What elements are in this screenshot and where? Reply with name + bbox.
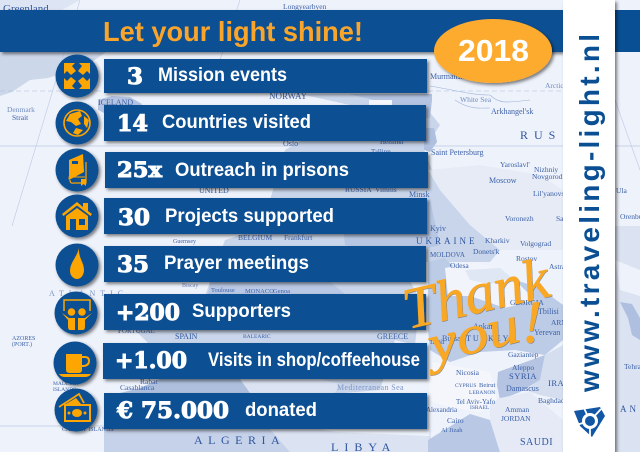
row: donated: donated [245,400,317,421]
row: outreach in prisons: 25x [117,157,163,182]
map place names: ICELAND [98,98,133,107]
map place names: Cairo [447,416,464,425]
map place names: TURKEY [466,334,510,343]
map place names: SYRIA [509,371,537,381]
map place names: Yaroslavl' [500,160,530,169]
row: prayer meetings: 35 [117,252,149,278]
map place names: NORWAY [269,91,308,101]
map place names: IRA [548,378,564,388]
title text: Let your light shine! [103,16,363,47]
map place names: Guernsey [173,239,196,245]
map place names: Genoa [273,288,290,295]
map place names: Astra [549,262,566,271]
map place names: Yerevan [534,328,560,337]
row: donated [104,393,427,429]
map place names: Strait [12,113,29,122]
map place names: Casablanca [120,383,155,392]
map place names: Murmansk [430,72,465,81]
map place names: Volgograd [520,239,551,248]
row: outreach in prisons [105,152,428,188]
thank you lettering: you [416,294,525,376]
map place names: Ula [616,186,628,195]
map place names: Biscay [182,283,198,289]
row: projects supported: 30 [118,205,150,231]
map place names: SPAIN [175,332,198,341]
map place names: White Sea [460,95,492,104]
map place names: BELGIUM [238,233,272,242]
map place names: Helsinki [380,138,404,146]
row: outreach in prisons: Outreach in prisons [175,160,349,181]
map place names: SAUDI [520,437,553,448]
map place names: Amman [505,405,529,414]
website address: www.traveling-light.nl [574,34,605,393]
map place names: Tbilisi [538,307,560,316]
map place names: Damascus [506,384,539,393]
year badge: 2018 [458,33,529,68]
icon: coffee cup [54,342,96,384]
icon: banknotes [54,388,98,432]
map place names: Baghdad [538,396,565,405]
map place names: Longyearbyen [283,2,327,11]
map place names: Ankara [473,322,497,331]
row: mission events [104,59,427,93]
map place names: CANARY ISLANDS [62,427,114,433]
map place names: Arctic [545,81,564,90]
icon: arrows [56,54,98,98]
map place names: Frankfurt [284,233,313,242]
icon: house [56,194,98,238]
map place names: AN [620,404,639,414]
row: prayer meetings: Prayer meetings [164,253,309,274]
map place names: ISLANDS [53,387,76,393]
map place names: Lil'yanovsk [533,189,568,198]
map place names: Nizhniy [534,165,558,174]
map place names: Alexandria [426,406,458,414]
map place names: GREECE [377,332,408,341]
year badge [434,19,552,83]
map place names: GEORGIA [510,298,544,307]
row: mission events: Mission events [158,65,287,86]
map place names: Nicosia [456,368,480,377]
map place names: (PORT.) [12,341,32,348]
map place names: Rostov [516,254,538,263]
map place names: Aleppo [512,363,534,372]
map place names: Voronezh [505,214,534,223]
map place names: Arkhangel'sk [491,107,533,116]
icon: supporters [54,292,98,334]
title banner [0,10,640,52]
map place names: RUS [520,128,561,142]
map place names: JORDAN [501,414,531,423]
map place names: UKRAINE [416,236,478,246]
map place names: Toulouse [211,287,235,294]
icon: globe [56,102,98,144]
map place names: ALGERIA [194,433,285,447]
map place names: PORTUGAL [118,327,155,335]
map place names: Beirut [479,382,495,389]
map place names: Saint Petersburg [431,148,484,157]
map place names: Tallinn [371,148,391,156]
row: donated: € 75.000 [116,398,229,424]
row: visits in shop/coffeehouse: Visits in shop/coffeehouse [208,350,420,371]
map place names: ARMENIA [551,318,587,327]
map place names: Donets'k [473,247,500,256]
icon: book [56,148,98,192]
map place names: ATLANTIC [49,289,128,298]
map place names: Rabat [140,377,158,386]
icon: flame [56,244,98,286]
website strip [563,0,615,452]
row: supporters: Supporters [192,301,291,322]
map place names: Vilnius [375,185,397,194]
map place names: Sar [556,214,566,223]
row: supporters: +200 [116,300,180,326]
map place names: UNITED [199,186,229,195]
row: countries visited: 14 [117,111,148,137]
map place names: CYPRUS [455,383,476,389]
row: projects supported [104,198,427,234]
map place names: BALEARIC [243,334,271,340]
map place names: Oslo [283,139,298,148]
thank you lettering: Thank [396,245,556,342]
logo [574,407,605,437]
map place names: Minsk [409,190,429,199]
row: supporters [104,294,426,330]
map place names: AZORES [12,336,35,342]
map place names: Moscow [489,176,517,185]
map place names: Bursa [442,334,461,343]
map place names: Odesa [450,261,469,270]
map place names: Al Jizah [441,427,463,434]
map place names: Tel Aviv-Yafo [456,398,496,406]
map place names: LEBANON [469,390,495,396]
row: visits in shop/coffeehouse: +1.00 [115,348,187,374]
map place names: Kyiv [430,224,446,233]
map place names: ISRAEL [470,405,490,411]
map place names: RUSSIA [345,185,372,194]
map place names: Greenland [3,3,49,15]
row: countries visited [104,105,426,141]
map place names: Kharkiv [485,236,510,245]
map place names: Novgorod [532,172,563,181]
map place names: MONACO [245,288,274,295]
thank you lettering: ! [522,289,542,355]
map place names: Gaziantep [508,350,539,359]
row: projects supported: Projects supported [165,206,334,227]
row: visits in shop/coffeehouse [103,343,427,379]
map place names: Mediterranean Sea [337,383,404,392]
map place names: MOLDOVA [430,251,465,259]
row: mission events: 3 [127,64,143,90]
map place names: Izmir [430,338,446,346]
row: prayer meetings [104,246,426,282]
row: countries visited: Countries visited [162,112,311,133]
map place names: Denmark [7,105,35,114]
map place names: MADEIRA [53,381,79,387]
